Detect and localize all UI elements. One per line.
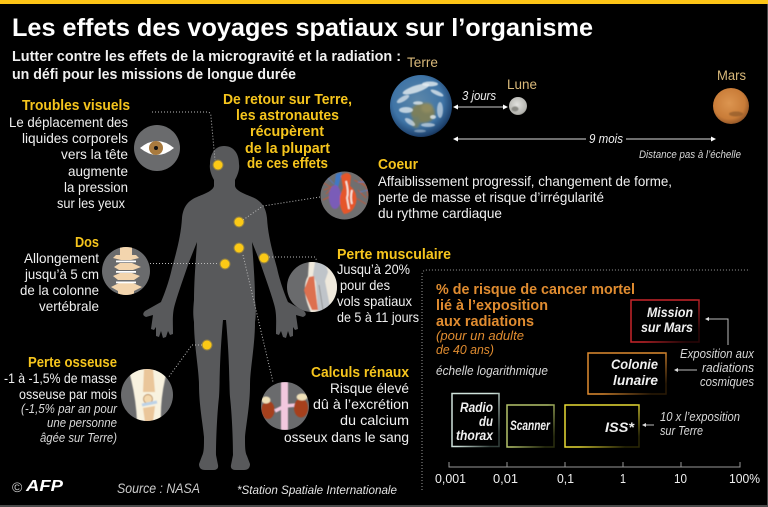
panel: perte musculaire: de 5 à 11 jours bbox=[337, 309, 419, 325]
arrow: 3 jours bbox=[453, 89, 508, 110]
footer credits: AFP bbox=[25, 478, 63, 495]
chart heading: lié à l’exposition bbox=[436, 298, 548, 314]
icon: knee bbox=[121, 368, 173, 422]
panel: perte osseuse: Perte osseuse bbox=[28, 355, 117, 371]
panel: troubles visuels: Le déplacement des bbox=[9, 114, 128, 130]
title: Les effets des voyages spatiaux sur l’organisme bbox=[12, 14, 593, 42]
arrow: 9 mois bbox=[453, 131, 716, 146]
box: Mission sur Mars: Mission bbox=[647, 305, 693, 320]
note: ISS exposure bbox=[660, 410, 740, 438]
panel: troubles visuels: liquides corporels bbox=[22, 130, 128, 146]
icon: heart bbox=[320, 172, 368, 220]
panel: perte osseuse: âgée sur Terre) bbox=[40, 431, 117, 445]
footer credits: Source : NASA bbox=[117, 481, 200, 496]
planet label: Lune: Lune bbox=[507, 76, 537, 92]
arrow: ISS note bbox=[642, 423, 654, 427]
log axis: 0,001 bbox=[435, 471, 466, 486]
chart heading: de 40 ans) bbox=[436, 343, 494, 357]
box: ISS: ISS* bbox=[605, 420, 635, 435]
box: Colonie lunaire bbox=[588, 353, 666, 394]
box: Scanner: Scanner bbox=[510, 418, 551, 433]
planet: Moon bbox=[509, 97, 527, 115]
panel: perte osseuse: (-1,5% par an pour bbox=[21, 402, 118, 416]
box: Mission sur Mars bbox=[631, 300, 699, 342]
arrow: 3 jours: 3 jours bbox=[462, 89, 496, 103]
arrows: cosmic exposure bbox=[674, 317, 728, 372]
panel: coeur: du rythme cardiaque bbox=[378, 205, 502, 221]
panel: calculs rénaux: Risque élevé bbox=[330, 380, 409, 396]
footer credits: *Station Spatiale Internationale bbox=[237, 485, 397, 497]
panel: troubles visuels: la pression bbox=[64, 179, 128, 195]
log axis: 100% bbox=[729, 471, 760, 486]
panel: troubles visuels: augmente bbox=[68, 163, 128, 179]
panel: troubles visuels: Troubles visuels bbox=[22, 98, 130, 114]
panel: dos: jusqu’à 5 cm bbox=[24, 266, 99, 282]
box: Radio du thorax: thorax bbox=[456, 428, 493, 443]
human body silhouette bbox=[143, 146, 306, 470]
note: ISS exposure: 10 x l’exposition bbox=[660, 410, 740, 424]
top accent bar bbox=[0, 0, 768, 4]
panel: Terre Lune Mars bbox=[390, 54, 749, 161]
panel: calculs rénaux: osseux dans le sang bbox=[284, 429, 409, 445]
chart heading: % de risque de cancer mortel bbox=[436, 282, 635, 298]
panel: calculs rénaux: du calcium bbox=[340, 412, 409, 428]
box: Radio du thorax: Radio bbox=[460, 400, 493, 415]
callout: retour sur Terre: de ces effets bbox=[247, 156, 328, 172]
callout: retour sur Terre bbox=[223, 92, 352, 172]
panel: radiation chart bbox=[422, 270, 760, 490]
panel: perte osseuse: une personne bbox=[47, 416, 117, 430]
callout: retour sur Terre: De retour sur Terre, bbox=[223, 92, 352, 108]
chart heading: (pour un adulte bbox=[436, 329, 524, 343]
icon: spine bbox=[102, 247, 150, 297]
panel: troubles visuels: sur les yeux bbox=[57, 195, 125, 211]
log axis: 0,01 bbox=[493, 471, 518, 486]
log axis: 0,1 bbox=[557, 471, 574, 486]
panel: perte musculaire: pour des bbox=[340, 277, 390, 293]
panel: calculs rénaux bbox=[284, 365, 409, 445]
panel: perte musculaire bbox=[337, 247, 451, 325]
panel: dos: de la colonne bbox=[20, 282, 99, 298]
scale note: échelle logarithmique bbox=[436, 364, 548, 378]
callout: retour sur Terre: les astronautes bbox=[236, 108, 339, 124]
body markers bbox=[202, 160, 268, 350]
panel: perte musculaire: Perte musculaire bbox=[337, 247, 451, 263]
box: Radio du thorax bbox=[452, 394, 499, 446]
subtitle bbox=[12, 49, 401, 83]
connector lines bbox=[150, 112, 320, 382]
panel: dos: vertébrale bbox=[39, 298, 99, 314]
planet label: Terre: Terre bbox=[407, 54, 438, 70]
box: Radio du thorax: du bbox=[479, 414, 494, 429]
panel: dos: Dos bbox=[75, 235, 99, 251]
panel: perte musculaire: vols spatiaux bbox=[337, 293, 412, 309]
panel: coeur: Coeur bbox=[378, 157, 418, 173]
footer credits bbox=[12, 478, 397, 497]
panel: perte osseuse bbox=[4, 355, 118, 445]
panel: troubles visuels: vers la tête bbox=[61, 146, 128, 162]
planet label: Mars: Mars bbox=[717, 67, 746, 83]
note: scale: Distance pas à l’échelle bbox=[639, 149, 741, 161]
panel: perte osseuse: osseuse par mois bbox=[19, 386, 117, 402]
note: cosmic exposure bbox=[680, 347, 755, 389]
log axis bbox=[435, 462, 760, 486]
callout: retour sur Terre: de la plupart bbox=[245, 141, 330, 157]
footer credits: © bbox=[12, 479, 23, 495]
box: Scanner bbox=[507, 405, 554, 447]
box: Colonie lunaire: Colonie bbox=[611, 357, 658, 372]
subtitle: un défi pour les missions de longue durée bbox=[12, 67, 296, 83]
icon: eye bbox=[134, 125, 180, 171]
box: ISS bbox=[565, 405, 639, 447]
panel: coeur: perte de masse et risque d’irrégularité bbox=[378, 189, 604, 205]
panel: dos: Allongement bbox=[24, 250, 99, 266]
panel: coeur: Affaiblissement progressif, changement de forme, bbox=[378, 173, 672, 189]
chart heading: aux radiations bbox=[436, 314, 534, 330]
arrow: 9 mois: 9 mois bbox=[589, 131, 623, 146]
panel: coeur bbox=[378, 157, 672, 221]
subtitle: Lutter contre les effets de la microgravité et la radiation : bbox=[12, 49, 401, 65]
chart heading bbox=[436, 282, 635, 357]
box: Colonie lunaire: lunaire bbox=[613, 373, 658, 388]
icon: muscle bbox=[287, 262, 337, 312]
callout: retour sur Terre: récupèrent bbox=[250, 124, 324, 140]
note: cosmic exposure: cosmiques bbox=[700, 375, 754, 389]
box: Mission sur Mars: sur Mars bbox=[641, 320, 693, 335]
note: ISS exposure: sur Terre bbox=[660, 424, 703, 438]
note: cosmic exposure: Exposition aux bbox=[680, 347, 755, 361]
log axis: 1 bbox=[620, 471, 626, 486]
panel: calculs rénaux: Calculs rénaux bbox=[311, 365, 409, 381]
log axis: 10 bbox=[674, 471, 687, 486]
panel: troubles visuels bbox=[9, 98, 130, 211]
panel: perte osseuse: -1 à -1,5% de masse bbox=[4, 370, 117, 386]
planet: Mars bbox=[713, 88, 749, 124]
note: cosmic exposure: radiations bbox=[702, 361, 754, 375]
icon: kidneys bbox=[261, 382, 309, 430]
panel: calculs rénaux: dû à l’excrétion bbox=[313, 396, 409, 412]
panel: perte musculaire: Jusqu’à 20% bbox=[337, 261, 410, 277]
planet: Earth bbox=[390, 75, 452, 137]
panel: dos bbox=[20, 235, 99, 314]
